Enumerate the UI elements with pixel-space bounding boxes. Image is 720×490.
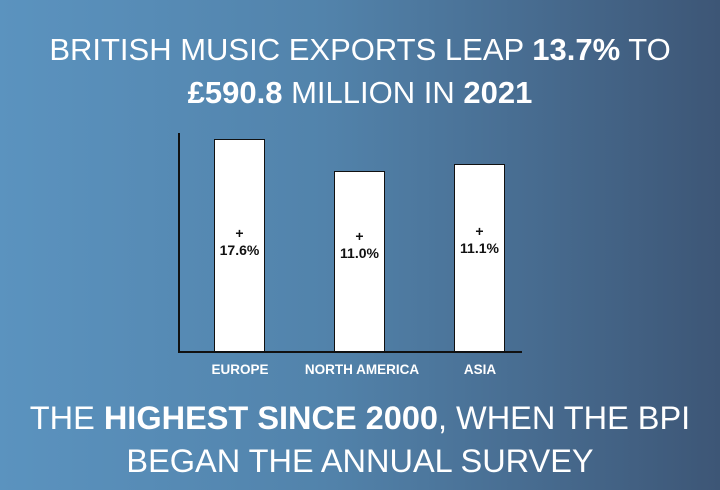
subtitle: THE HIGHEST SINCE 2000, WHEN THE BPI [30,400,690,436]
title: £590.8 MILLION IN 2021 [188,75,532,110]
bar chart: 11.1% [460,240,499,256]
bar chart: 11.0% [340,245,379,261]
category labels [211,362,496,377]
title: BRITISH MUSIC EXPORTS LEAP 13.7% TO [49,32,671,67]
bar: asia [454,164,505,352]
text: EUROPE [211,362,268,377]
bar chart: 17.6% [220,242,259,258]
bar chart [178,133,522,353]
bar chart: + [355,228,364,244]
bar chart: + [235,225,244,241]
bar chart: + [475,223,484,239]
subtitle [30,400,690,479]
title [49,32,671,110]
bar: north america [334,171,385,352]
subtitle: BEGAN THE ANNUAL SURVEY [126,443,594,479]
text: NORTH AMERICA [305,362,419,377]
text: ASIA [464,362,496,377]
bar: europe [214,139,265,352]
